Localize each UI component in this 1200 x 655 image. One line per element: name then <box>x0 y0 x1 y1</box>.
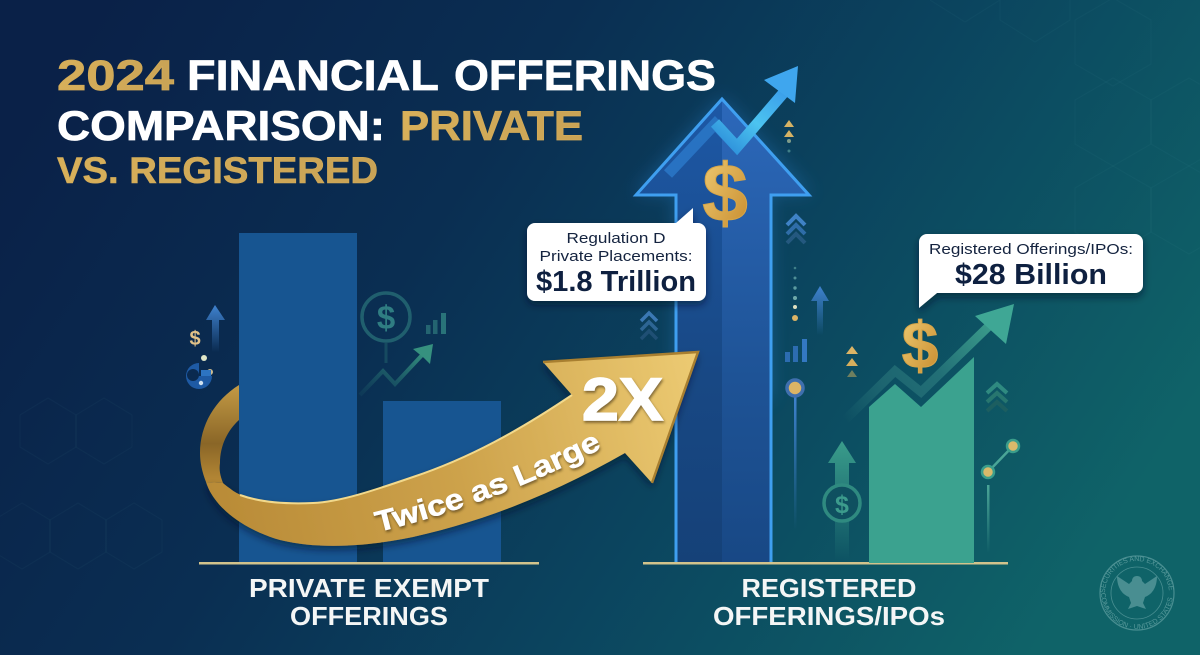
callout: regulation D: Regulation D <box>566 230 666 247</box>
icon: teal dollar circle: $ <box>377 299 395 336</box>
ribbon text: Twice as Large <box>373 436 602 534</box>
baseline: private <box>199 562 539 564</box>
blue upward arrow <box>636 99 809 563</box>
seal: SECURITIES AND EXCHANGE <box>1100 556 1174 592</box>
axis label: registered offerings: OFFERINGS/IPOs <box>713 601 945 631</box>
icon: blue arrow and coins left: $ <box>189 328 201 350</box>
callout: regulation D: $1.8 Trillion <box>536 266 696 298</box>
title: COMPARISON: <box>57 102 385 149</box>
connected nodes <box>982 440 1019 553</box>
title: PRIVATE <box>400 102 583 149</box>
bar: private exempt short <box>383 401 501 563</box>
ribbon back loop <box>200 385 239 483</box>
seal: COMMISSION · UNITED STATES <box>1101 593 1172 629</box>
baseline: registered <box>643 562 1008 564</box>
dotted progression <box>792 267 798 321</box>
title: 2024 <box>57 52 174 100</box>
small gold triangles left of green bar <box>846 346 858 377</box>
green arrow head <box>975 304 1014 344</box>
axis label: private exempt offerings: PRIVATE EXEMPT <box>249 573 489 603</box>
axis label: private exempt offerings <box>249 573 489 631</box>
title <box>57 52 716 191</box>
icon: teal dollar circle <box>362 293 410 363</box>
blue arrow glow <box>634 97 812 400</box>
callout: registered <box>919 234 1143 308</box>
title: FINANCIAL <box>187 52 439 100</box>
chevrons right of blue arrow <box>787 216 805 243</box>
gold dollar sign on blue arrow: $ <box>702 148 748 239</box>
callout: regulation D <box>527 208 706 301</box>
small gold triangles <box>784 120 794 152</box>
green trend line <box>845 325 990 420</box>
axis label: registered offerings: REGISTERED <box>742 573 916 603</box>
axis label: private exempt offerings: OFFERINGS <box>290 601 448 631</box>
bar: registered offerings <box>869 357 974 563</box>
2X label: 2X <box>582 366 663 433</box>
gold ribbon arrow <box>206 352 698 546</box>
icon: teal trend arrow and mini bars <box>360 313 446 395</box>
chevrons left of blue arrow <box>641 313 657 339</box>
seal <box>1099 555 1175 631</box>
axis label: registered offerings <box>713 573 945 631</box>
neon trend arrow <box>715 66 798 147</box>
mini blue bars <box>785 339 807 362</box>
callout: regulation D: Private Placements: <box>540 248 692 265</box>
bar: private exempt tall <box>239 233 357 563</box>
title: OFFERINGS <box>454 52 716 100</box>
title: VS. REGISTERED <box>57 150 378 191</box>
icon: blue arrow and coins left <box>186 305 225 389</box>
teal up arrow with dollar coin: $ <box>835 491 849 519</box>
small blue up arrow <box>811 286 829 335</box>
callout: registered: $28 Billion <box>955 259 1107 291</box>
gold dollar sign on green bar: $ <box>902 308 938 382</box>
teal up arrow with dollar coin <box>824 441 860 560</box>
callout: registered: Registered Offerings/IPOs: <box>929 241 1133 258</box>
chevrons right of green bar <box>987 384 1007 411</box>
node with line <box>787 380 803 530</box>
